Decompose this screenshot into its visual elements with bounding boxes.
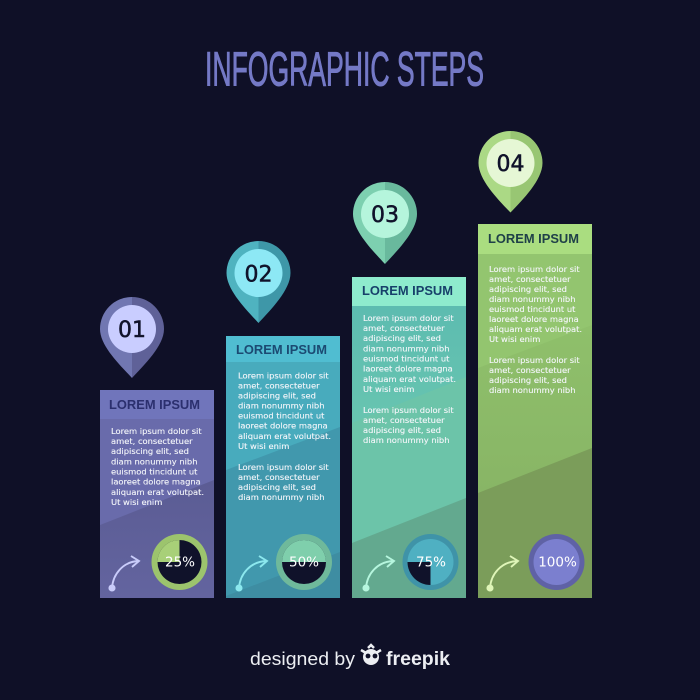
step 4 progress 100% [528, 534, 584, 590]
step 1 panel [100, 390, 214, 598]
step 4 arrow [487, 556, 518, 591]
pin 03 [353, 182, 417, 264]
step 3 progress 75%: 75% [416, 554, 446, 570]
step 4 progress 100%: 100% [538, 554, 577, 570]
step 1 heading: LOREM IPSUM [109, 397, 200, 412]
step 2 body text: Lorem ipsum dolor sit [238, 462, 329, 472]
step 4 panel [478, 224, 592, 598]
pin 03: 03 [371, 203, 399, 228]
step 2 progress 50%: 50% [289, 554, 319, 570]
step 3 panel [352, 277, 466, 598]
step 4 body text: aliquam erat volutpat. [489, 324, 582, 334]
step 3 body text: euismod tincidunt ut [363, 354, 450, 364]
step 1 body text: Ut wisi enim [111, 497, 162, 507]
step 2 heading: LOREM IPSUM [236, 342, 327, 357]
step 2 body text: diam nonummy nibh [238, 400, 325, 410]
step 4 body text: adipiscing elit, sed [489, 375, 567, 385]
step 3 heading: LOREM IPSUM [362, 283, 453, 298]
step 2 body text: Lorem ipsum dolor sit [238, 370, 329, 380]
step 3 body text: amet, consectetuer [363, 415, 445, 425]
step 1 progress 25% [152, 534, 208, 590]
step 4 body text: laoreet dolore magna [489, 314, 579, 324]
step 3 body text: Lorem ipsum dolor sit [363, 405, 454, 415]
step 4 body text: amet, consectetuer [489, 365, 571, 375]
step 4 body text: Lorem ipsum dolor sit [489, 355, 580, 365]
step 2 body text: amet, consectetuer [238, 472, 320, 482]
pin 02: 02 [244, 262, 272, 288]
step 2 body text: aliquam erat volutpat. [238, 431, 331, 441]
step 4 body text: diam nonummy nibh [489, 385, 576, 395]
step 2 body text: euismod tincidunt ut [238, 410, 325, 420]
step 3 body text: laoreet dolore magna [363, 364, 453, 374]
step 2 body text: laoreet dolore magna [238, 420, 328, 430]
step 2 body text: adipiscing elit, sed [238, 390, 316, 400]
step 3 body text: Lorem ipsum dolor sit [363, 313, 454, 323]
step 3 body text: adipiscing elit, sed [363, 425, 441, 435]
footer credit: freepik [386, 649, 450, 670]
step 3 body text: aliquam erat volutpat. [363, 374, 456, 384]
step 4 heading: LOREM IPSUM [488, 231, 579, 246]
pin 01 [100, 297, 164, 378]
title: INFOGRAPHIC STEPS [205, 44, 484, 96]
step 1 arrow [109, 556, 139, 591]
pin 04: 04 [496, 152, 524, 177]
step 2 body text: amet, consectetuer [238, 380, 320, 390]
step 3 body text: diam nonummy nibh [363, 344, 450, 354]
step 4 body text: euismod tincidunt ut [489, 304, 576, 314]
step 1 body text: Lorem ipsum dolor sit [111, 426, 202, 436]
step 2 panel [226, 336, 340, 598]
step 2 body text: diam nonummy nibh [238, 492, 325, 502]
step 1 body text: diam nonummy nibh [111, 456, 198, 466]
step 1 body text: laoreet dolore magna [111, 476, 201, 486]
step 3 arrow [363, 556, 394, 591]
step 2 body text: adipiscing elit, sed [238, 482, 316, 492]
step 1 body text: amet, consectetuer [111, 436, 193, 446]
step 3 body text: diam nonummy nibh [363, 435, 450, 445]
pin 02 [226, 241, 290, 323]
pin 01: 01 [118, 318, 146, 343]
footer credit: designed by [250, 649, 355, 669]
step 1 body text: euismod tincidunt ut [111, 466, 198, 476]
footer credit [250, 645, 450, 670]
step 4 body text: adipiscing elit, sed [489, 284, 567, 294]
step 3 body text: Ut wisi enim [363, 384, 414, 394]
step 3 body text: adipiscing elit, sed [363, 333, 441, 343]
step 3 body text: amet, consectetuer [363, 323, 445, 333]
step 4 body text: Ut wisi enim [489, 334, 540, 344]
step 1 body text: aliquam erat volutpat. [111, 487, 204, 497]
step 4 body text: Lorem ipsum dolor sit [489, 264, 580, 274]
step 2 body text: Ut wisi enim [238, 441, 289, 451]
step 4 body text: diam nonummy nibh [489, 294, 576, 304]
step 4 body text: amet, consectetuer [489, 274, 571, 284]
step 2 progress 50% [276, 534, 332, 590]
step 2 arrow [236, 556, 267, 591]
icon: freepik mascot [361, 645, 381, 665]
step 1 body text: adipiscing elit, sed [111, 446, 189, 456]
step 1 progress 25%: 25% [165, 554, 195, 570]
step 3 progress 75% [402, 534, 458, 590]
pin 04 [478, 131, 542, 212]
